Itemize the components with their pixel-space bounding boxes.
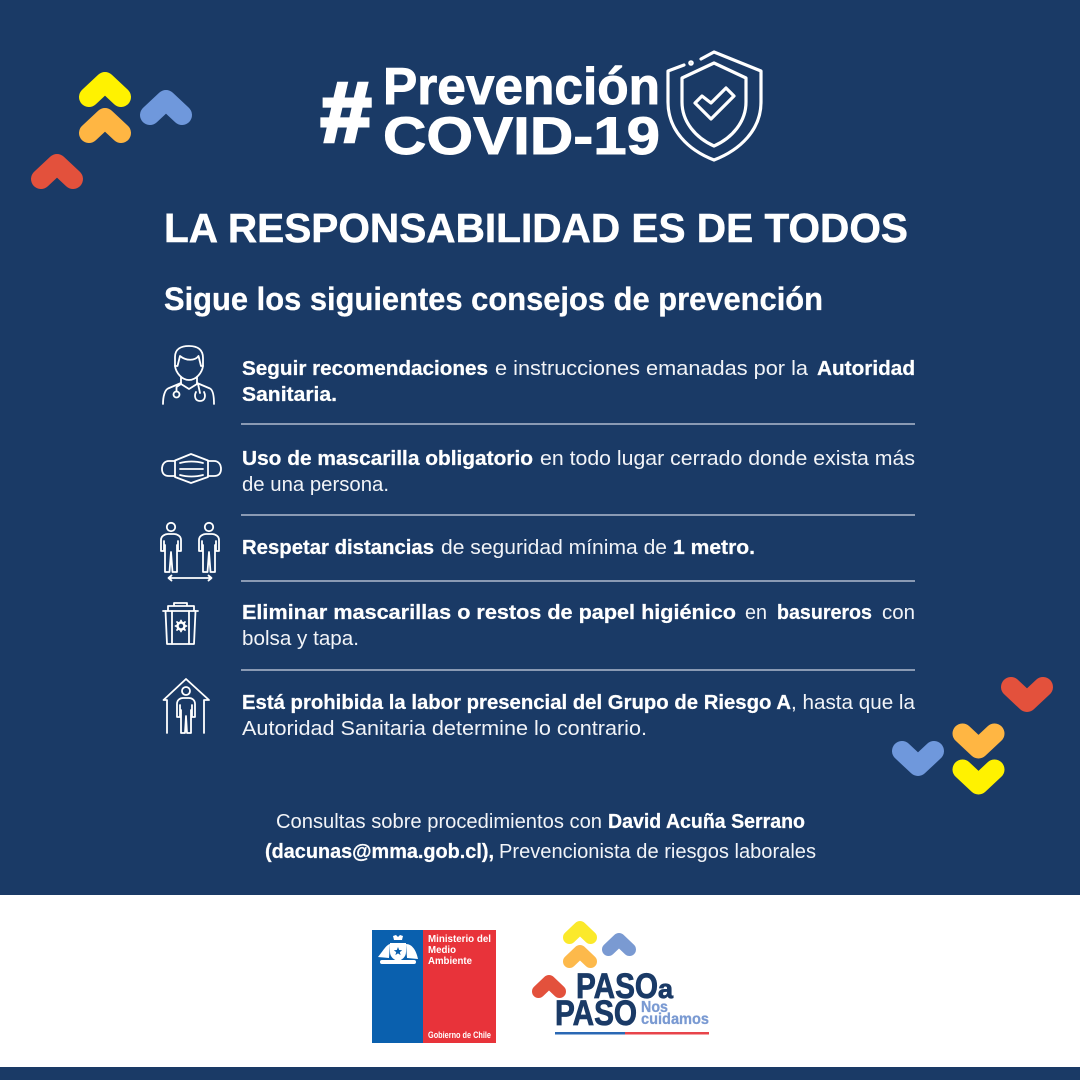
icon: two people keeping distance	[161, 523, 219, 580]
row 3 text: distancias	[242, 536, 755, 559]
title: #Prevención COVID-19	[321, 58, 660, 166]
row 4 text: basureros: con	[882, 601, 915, 624]
contact note: David Acuña Serrano	[608, 811, 805, 833]
title: #Prevención COVID-19: #	[321, 65, 371, 159]
contact note	[265, 811, 816, 863]
subheading: consejos de prevención: Sigue los siguientes consejos de prevención	[164, 281, 823, 317]
row 2 text: mascarilla: en todo lugar cerrado donde exista más	[540, 447, 915, 470]
title: #Prevención COVID-19: COVID-19	[383, 107, 660, 166]
row 5 text: grupo de riesgo: Autoridad Sanitaria determine lo contrario.	[242, 717, 647, 740]
row 4 text: basureros: basureros	[777, 601, 872, 624]
contact note: Prevencionista de riesgos laborales	[499, 841, 816, 863]
logo: Paso a Paso Nos cuidamos: a	[658, 974, 674, 1004]
decorative chevrons: top left	[41, 82, 182, 179]
logo: Paso a Paso Nos cuidamos	[538, 928, 709, 1034]
row 5 text: grupo de riesgo	[242, 691, 916, 740]
logo: Ministerio del Medio Ambiente: Gobierno de Chile	[428, 1030, 491, 1041]
row 1 text: recomendaciones: Seguir recomendaciones	[242, 357, 488, 380]
row 3 text: distancias: 1 metro.	[673, 536, 755, 559]
icon: shield with check	[668, 52, 761, 160]
row 1 text: recomendaciones	[242, 357, 915, 406]
row 3 text: distancias: de seguridad mínima de	[441, 536, 667, 559]
row 1 text: recomendaciones: e instrucciones emanadas por la	[495, 357, 809, 380]
logo: Paso a Paso Nos cuidamos: cuidamos	[641, 1011, 709, 1028]
icon: face mask	[162, 454, 221, 483]
contact note: Consultas sobre procedimientos con	[276, 811, 602, 833]
row 4 text: basureros	[242, 601, 915, 650]
row 4 text: basureros: Eliminar mascarillas o restos de papel higiénico	[242, 601, 736, 624]
logo: Ministerio del Medio Ambiente: Ambiente	[428, 955, 472, 967]
icon: coat of arms	[378, 935, 418, 964]
row 5 text: grupo de riesgo: Está prohibida la labor presencial del Grupo de Riesgo A	[242, 691, 791, 714]
row 4 text: basureros: bolsa y tapa.	[242, 627, 359, 650]
contact note: (dacunas@mma.gob.cl),	[265, 841, 494, 863]
footer band	[0, 895, 1080, 1067]
title: #Prevención COVID-19: Prevención	[383, 58, 660, 116]
heading: La responsabilidad es de todos: LA RESPONSABILIDAD ES DE TODOS	[164, 205, 908, 251]
row 2 text: mascarilla: de una persona.	[242, 473, 389, 496]
row 4 text: basureros: en	[745, 601, 767, 624]
logo: Paso a Paso Nos cuidamos: Nos	[641, 999, 668, 1016]
row 2 text: mascarilla: Uso de mascarilla obligatorio	[242, 447, 533, 470]
row 1 text: recomendaciones: Sanitaria.	[242, 383, 337, 406]
logo: Ministerio del Medio Ambiente: Ministerio del	[428, 933, 491, 945]
logo: Ministerio del Medio Ambiente	[372, 930, 496, 1043]
row 2 text: mascarilla	[242, 447, 915, 496]
logo: Ministerio del Medio Ambiente: Medio	[428, 944, 456, 956]
icon: doctor	[163, 346, 214, 404]
row 3 text: distancias: Respetar distancias	[242, 536, 434, 559]
row 1 text: recomendaciones: Autoridad	[817, 357, 915, 380]
icon: trash bin	[163, 603, 198, 644]
logo: Paso a Paso Nos cuidamos: PASO	[576, 967, 658, 1006]
row 5 text: grupo de riesgo: , hasta que la	[791, 691, 916, 714]
icon: person inside house	[164, 679, 209, 733]
decorative chevrons: bottom right	[902, 687, 1043, 784]
logo: Paso a Paso Nos cuidamos: PASO	[555, 994, 637, 1033]
